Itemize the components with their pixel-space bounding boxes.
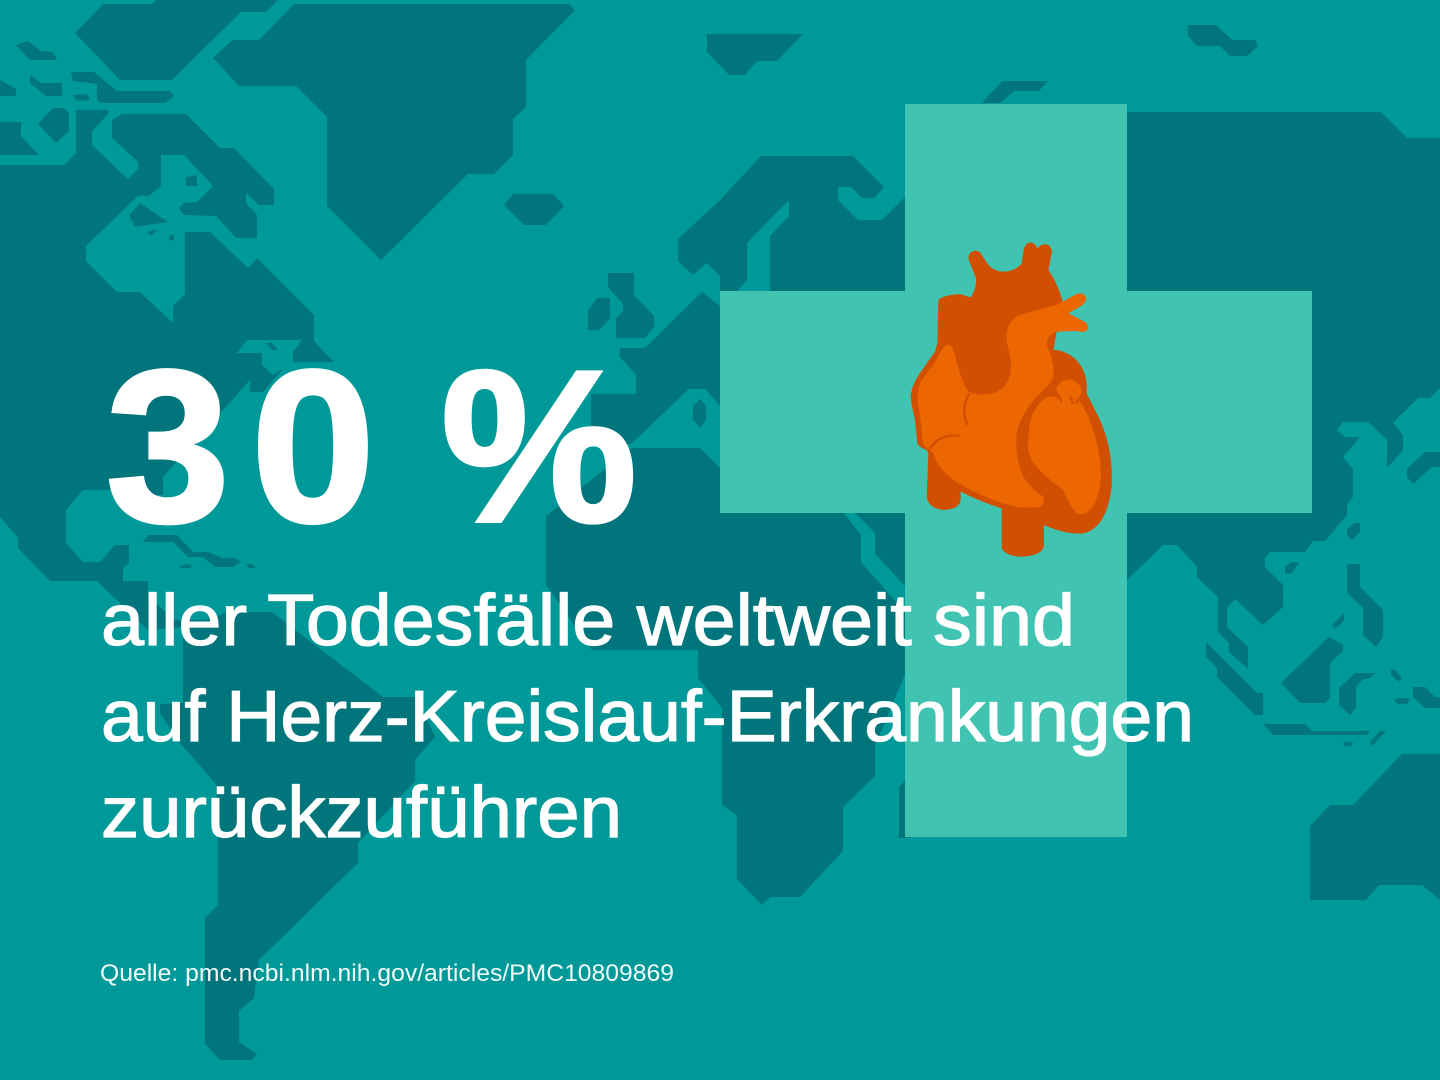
icon: anatomical heart [911, 243, 1112, 557]
main statement text: auf Herz-Kreislauf-Erkrankungen [101, 677, 1194, 757]
main statement text: zurückzuführen [101, 773, 622, 853]
headline: 30 %: 30 [106, 327, 375, 567]
main statement text: aller Todesfälle weltweit sind [101, 581, 1075, 661]
source note: Quelle: pmc.ncbi.nlm.nih.gov/articles/PMC10809869 [100, 960, 674, 987]
main statement text [101, 581, 1194, 853]
medical cross [720, 104, 1312, 837]
headline: 30 % [106, 326, 637, 568]
headline: 30 %: % [441, 326, 637, 568]
